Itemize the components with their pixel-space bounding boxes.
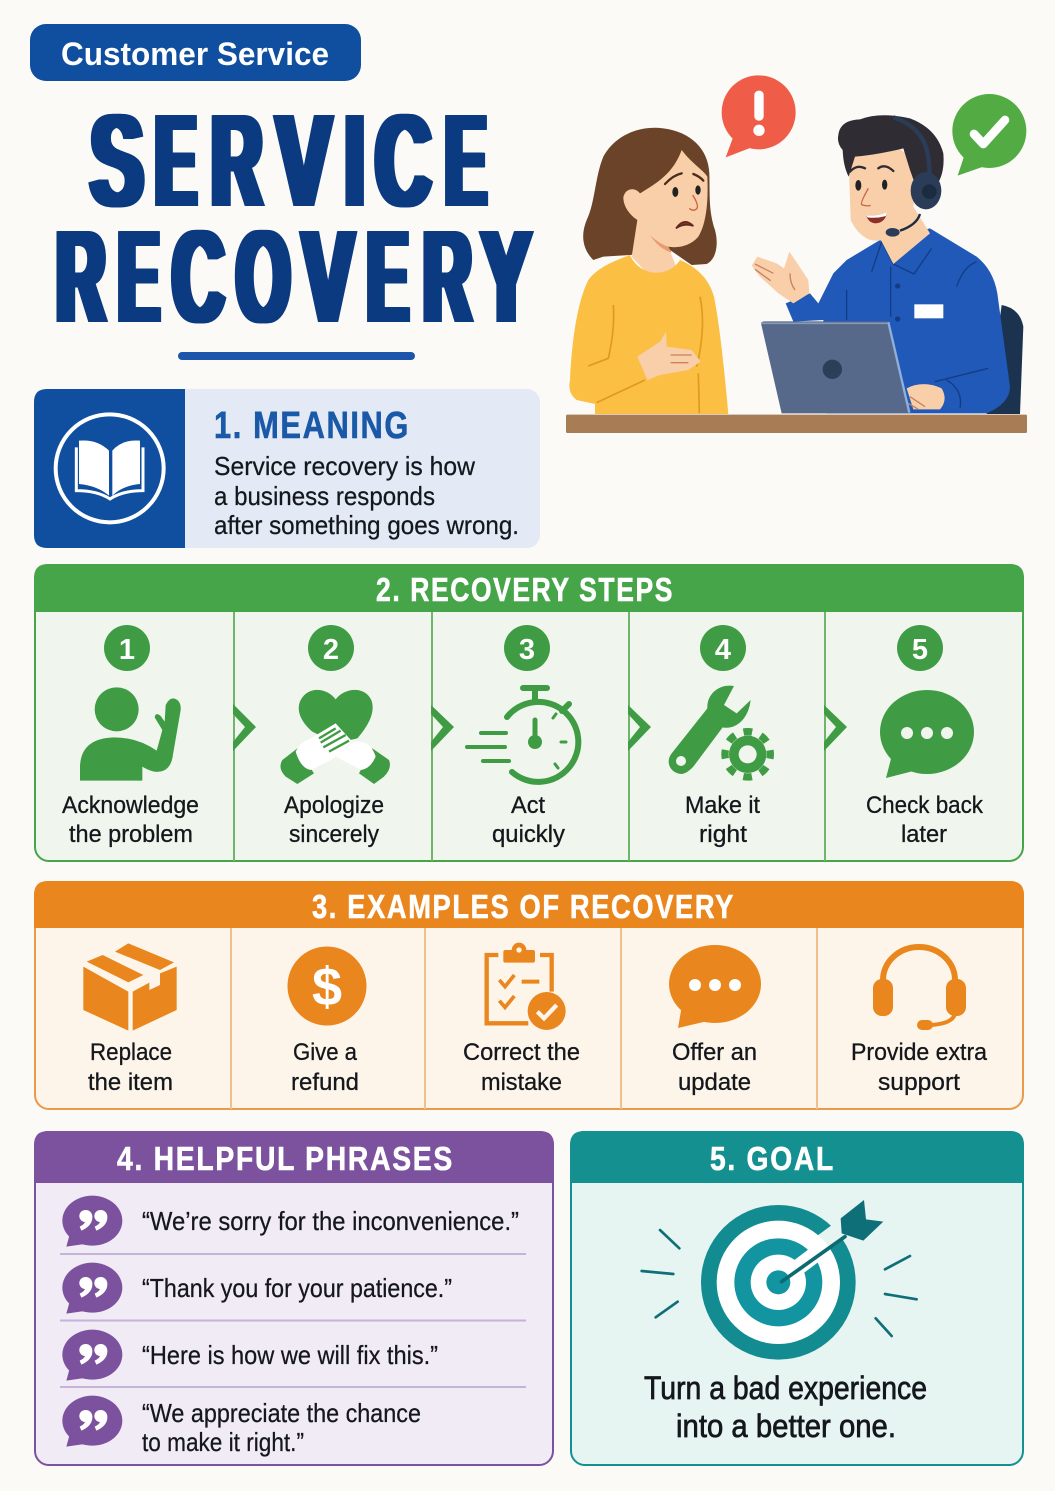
example 2: give a refund: Give a bbox=[293, 1039, 358, 1066]
step 2: apologize: Apologize bbox=[284, 792, 384, 819]
goal text bbox=[644, 1370, 927, 1444]
panel: 1 meaning bbox=[34, 389, 540, 548]
step 1: acknowledge bbox=[62, 625, 199, 848]
title: C bbox=[168, 203, 219, 350]
title: Y bbox=[477, 203, 526, 350]
goal text: Turn a bad experience bbox=[644, 1370, 927, 1406]
arrows between steps bbox=[233, 704, 847, 751]
step 2: apologize: sincerely bbox=[289, 821, 379, 848]
step 2: apologize bbox=[280, 625, 390, 848]
speech bubble: alert bbox=[722, 75, 796, 157]
title: R bbox=[52, 203, 101, 350]
table bbox=[566, 415, 1027, 433]
phrase 4: “We appreciate the chance bbox=[142, 1398, 421, 1428]
title: V bbox=[272, 87, 327, 234]
example 4: offer an update: Offer an bbox=[672, 1039, 757, 1066]
step 4: make it right: 4 bbox=[715, 634, 731, 666]
example 1: replace the item: the item bbox=[88, 1069, 173, 1096]
goal text: into a better one. bbox=[676, 1408, 896, 1444]
icon: open book bbox=[56, 414, 164, 522]
step 3: act quickly bbox=[467, 625, 578, 848]
example 3: correct the mistake: mistake bbox=[481, 1069, 562, 1096]
heading: meaning: 1. MEANING bbox=[214, 405, 410, 447]
phrase 2 bbox=[62, 1263, 452, 1314]
example 3: correct the mistake: Correct the bbox=[463, 1039, 580, 1066]
step 3: act quickly: Act bbox=[511, 792, 545, 819]
example 5: provide extra support bbox=[851, 947, 988, 1096]
step 5: check back later: later bbox=[901, 821, 947, 848]
heading: examples: 3. EXAMPLES OF RECOVERY bbox=[312, 888, 735, 925]
meaning text bbox=[214, 451, 519, 540]
title: E bbox=[440, 87, 481, 234]
step 1: acknowledge: the problem bbox=[69, 821, 193, 848]
title: V bbox=[298, 203, 349, 350]
customer bbox=[569, 128, 728, 414]
example 2: give a refund bbox=[288, 946, 366, 1096]
title: S bbox=[86, 87, 139, 234]
step 2: apologize: 2 bbox=[323, 634, 339, 666]
title: R bbox=[207, 87, 258, 234]
step 5: check back later: Check back bbox=[866, 792, 984, 819]
example 2: give a refund: $ bbox=[312, 957, 342, 1017]
title underline bbox=[178, 352, 415, 360]
title: R bbox=[419, 203, 467, 350]
phrase 1: “We’re sorry for the inconvenience.” bbox=[142, 1206, 519, 1236]
title: E bbox=[114, 203, 154, 350]
phrase 4 bbox=[62, 1396, 421, 1457]
category pill bbox=[30, 24, 361, 81]
title: I bbox=[340, 87, 359, 234]
speech bubble: check bbox=[952, 94, 1026, 176]
service agent bbox=[752, 115, 1023, 414]
meaning text: after something goes wrong. bbox=[214, 510, 519, 540]
title: E bbox=[150, 87, 191, 234]
title: C bbox=[371, 87, 426, 234]
step 5: check back later bbox=[866, 625, 984, 848]
phrase 4: to make it right.” bbox=[142, 1427, 304, 1457]
phrase 3: “Here is how we will fix this.” bbox=[142, 1340, 438, 1370]
phrase 1 bbox=[62, 1196, 519, 1247]
title bbox=[52, 87, 534, 350]
panel: 5 goal bbox=[570, 1131, 1024, 1465]
heading: goal: 5. GOAL bbox=[710, 1140, 835, 1177]
heading: helpful phrases: 4. HELPFUL PHRASES bbox=[117, 1140, 454, 1177]
example 4: offer an update: update bbox=[678, 1069, 751, 1096]
meaning text: Service recovery is how bbox=[214, 451, 475, 481]
step 1: acknowledge: Acknowledge bbox=[62, 792, 199, 819]
example 2: give a refund: refund bbox=[291, 1069, 359, 1096]
step 4: make it right: Make it bbox=[685, 792, 760, 819]
example 4: offer an update bbox=[669, 945, 761, 1096]
icon: target with arrow bbox=[642, 1200, 917, 1360]
panel: 2 recovery steps bbox=[34, 564, 1024, 861]
step 3: act quickly: quickly bbox=[492, 821, 565, 848]
illustration: customer and service agent bbox=[566, 75, 1027, 433]
step 4: make it right: right bbox=[699, 821, 747, 848]
step 3: act quickly: 3 bbox=[519, 634, 535, 666]
example 5: provide extra support: Provide extra bbox=[851, 1039, 988, 1066]
panel: 3 examples of recovery bbox=[34, 881, 1024, 1109]
heading: recovery steps: 2. RECOVERY STEPS bbox=[376, 571, 674, 608]
step 1: acknowledge: 1 bbox=[119, 634, 135, 666]
phrase 3 bbox=[62, 1330, 438, 1381]
title: O bbox=[232, 203, 285, 350]
example 1: replace the item bbox=[83, 943, 177, 1096]
category pill: Customer Service bbox=[61, 36, 329, 72]
example 1: replace the item: Replace bbox=[90, 1039, 172, 1066]
title: E bbox=[362, 203, 403, 350]
meaning text: a business responds bbox=[214, 481, 435, 511]
panel: 4 helpful phrases bbox=[34, 1131, 554, 1465]
example 3: correct the mistake bbox=[463, 943, 580, 1096]
example 5: provide extra support: support bbox=[878, 1069, 960, 1096]
step 5: check back later: 5 bbox=[912, 634, 928, 666]
step 4: make it right bbox=[669, 625, 770, 848]
phrase 2: “Thank you for your patience.” bbox=[142, 1273, 452, 1303]
